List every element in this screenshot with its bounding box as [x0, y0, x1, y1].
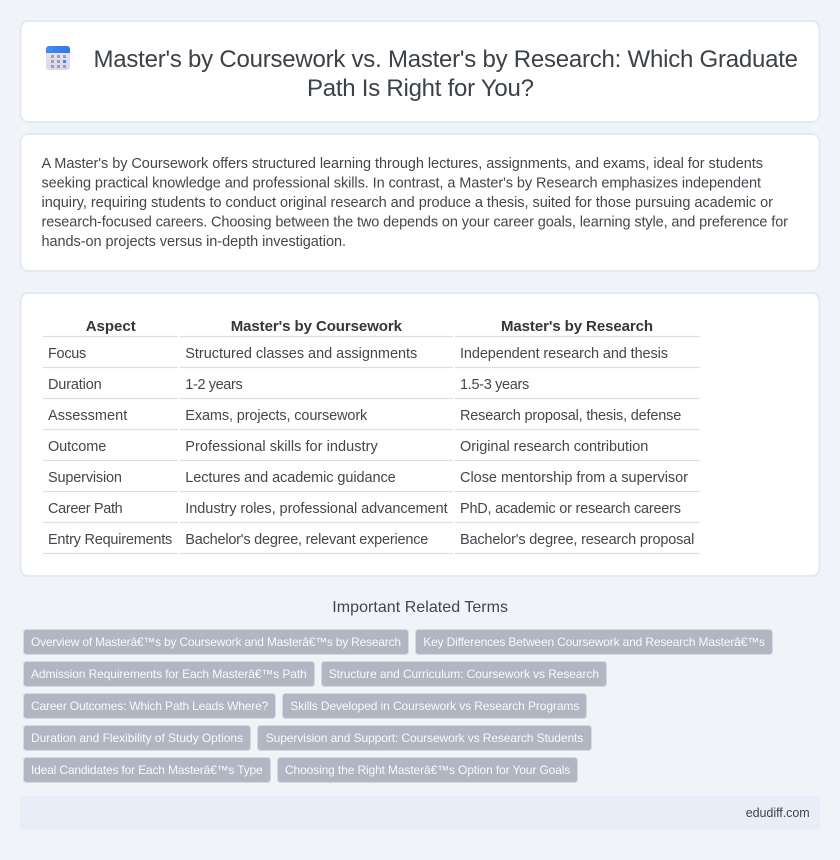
chip	[24, 694, 276, 718]
row: assessment: Research proposal, thesis, defense	[460, 408, 681, 424]
chip	[258, 726, 592, 750]
chip	[416, 630, 772, 654]
chip	[24, 758, 270, 782]
heading: important related terms: Important Related Terms	[332, 599, 508, 616]
chip	[24, 630, 408, 654]
row: career path: PhD, academic or research careers	[460, 501, 681, 517]
panel: introduction text: research-focused careers. Choosing between the two depends on your career goals, learning style, and preference for	[42, 214, 788, 230]
panel: page header	[20, 21, 820, 122]
related term chips	[24, 630, 772, 782]
row: career path: Industry roles, professional advancement	[185, 501, 448, 517]
chip: Structure and Curriculum: Coursework vs Research	[329, 667, 599, 681]
table header row	[86, 318, 653, 335]
footer: edudiff.com	[746, 806, 810, 820]
chip: Key Differences Between Coursework and Research Masterâ€™s	[423, 635, 765, 649]
title: Master's by Coursework vs. Master's by Research: Which Graduate	[94, 46, 798, 73]
chip	[322, 662, 606, 686]
panel: introduction text: inquiry, requiring students to conduct original research and produce a thesis, suited for those pursuing academic or	[42, 195, 773, 211]
chip	[278, 758, 578, 782]
row: outcome	[48, 439, 648, 455]
row: supervision	[48, 470, 688, 486]
chip: Career Outcomes: Which Path Leads Where?	[31, 699, 269, 713]
row: entry requirements	[48, 532, 694, 548]
icon: calendar	[46, 46, 70, 70]
row: duration	[48, 377, 529, 393]
panel: introduction text	[20, 134, 820, 271]
row: entry requirements: Bachelor's degree, research proposal	[460, 532, 694, 548]
table header row: Master's by Coursework	[231, 318, 403, 335]
footer	[20, 796, 820, 830]
row: career path	[48, 501, 681, 517]
chip: Supervision and Support: Coursework vs Research Students	[266, 731, 583, 745]
chip	[24, 662, 314, 686]
panel: introduction text: seeking practical knowledge and professional skills. In contrast, a Master's by Research emphasizes independent	[42, 176, 761, 192]
title	[94, 46, 798, 102]
chip: Admission Requirements for Each Masterâ€™s Path	[31, 667, 307, 681]
title: Path Is Right for You?	[307, 75, 534, 102]
row: outcome: Outcome	[48, 439, 106, 455]
row: entry requirements: Bachelor's degree, relevant experience	[185, 532, 428, 548]
row: duration: Duration	[48, 377, 102, 393]
row: focus: Structured classes and assignments	[185, 346, 417, 362]
table header row: Aspect	[86, 318, 136, 335]
row: assessment	[48, 408, 681, 424]
chip: Choosing the Right Masterâ€™s Option for Your Goals	[285, 763, 570, 777]
row: career path: Career Path	[48, 501, 123, 517]
row: assessment: Assessment	[48, 408, 127, 424]
table header row: Master's by Research	[501, 318, 653, 335]
panel: introduction text: A Master's by Coursework offers structured learning through lectures, assignments, and exams, ideal for students	[42, 156, 763, 172]
chip: Skills Developed in Coursework vs Research Programs	[290, 699, 579, 713]
row: focus: Focus	[48, 346, 86, 362]
panel: comparison table	[20, 293, 820, 576]
chip: Overview of Masterâ€™s by Coursework and Masterâ€™s by Research	[31, 635, 401, 649]
row: focus	[48, 346, 668, 362]
row: assessment: Exams, projects, coursework	[185, 408, 368, 424]
row: supervision: Lectures and academic guidance	[185, 470, 396, 486]
row: supervision: Close mentorship from a supervisor	[460, 470, 688, 486]
chip	[24, 726, 250, 750]
chip	[282, 694, 586, 718]
chip: Duration and Flexibility of Study Options	[31, 731, 243, 745]
row: outcome: Professional skills for industry	[185, 439, 378, 455]
panel: introduction text: hands-on projects versus in-depth investigation.	[42, 234, 346, 250]
row: duration: 1-2 years	[185, 377, 243, 393]
chip: Ideal Candidates for Each Masterâ€™s Type	[31, 763, 263, 777]
row: outcome: Original research contribution	[460, 439, 648, 455]
row: focus: Independent research and thesis	[460, 346, 668, 362]
row: duration: 1.5-3 years	[460, 377, 529, 393]
row: supervision: Supervision	[48, 470, 122, 486]
row: entry requirements: Entry Requirements	[48, 532, 172, 548]
